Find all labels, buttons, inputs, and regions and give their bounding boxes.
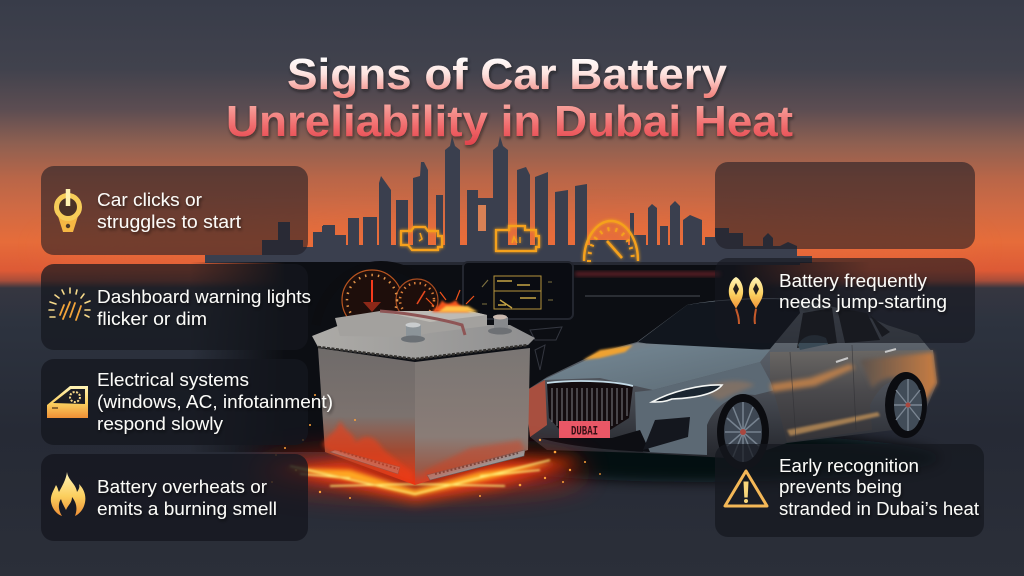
icon: speed gauge warning — [584, 221, 638, 262]
text: car clicks: Car clicks or — [97, 190, 202, 210]
battery right face — [415, 348, 530, 485]
wing mirror — [798, 335, 828, 350]
grille — [547, 381, 633, 430]
lower bumper intake — [540, 430, 650, 452]
instrument cluster gauges — [342, 270, 438, 330]
Dubai skyline silhouette — [205, 136, 812, 263]
hood — [543, 343, 770, 390]
front wheel — [717, 394, 769, 470]
text: early recognition: Early recognition — [779, 456, 919, 476]
battery top plate — [312, 325, 535, 359]
flames on battery — [322, 420, 412, 482]
dashboard — [190, 262, 870, 452]
panel: early recognition — [715, 444, 984, 537]
door orange reflection — [770, 364, 855, 392]
icon: flame — [51, 472, 85, 516]
title: Unreliability in Dubai Heat — [226, 97, 793, 146]
text: electrical: respond slowly — [97, 414, 223, 434]
title: Signs of Car Battery — [287, 50, 728, 99]
headlight — [652, 385, 722, 402]
panel: empty right top — [715, 162, 975, 249]
title — [226, 50, 793, 146]
car shadow on ground — [460, 434, 940, 482]
text: overheats: Battery overheats or — [97, 477, 267, 497]
side windows — [797, 308, 890, 348]
door panels — [770, 350, 937, 442]
luxury sedan car — [527, 298, 937, 470]
car battery overheating — [312, 290, 535, 485]
battery left face — [318, 348, 415, 485]
steering wheel — [316, 265, 446, 325]
warning lights above dashboard — [401, 221, 638, 262]
text: dashboard: Dashboard warning lights — [97, 287, 311, 307]
panel: dashboard warning lights — [41, 264, 311, 350]
front fender and bumper — [635, 362, 775, 455]
red fire-lit bumper side — [527, 380, 547, 437]
door handles — [836, 349, 896, 362]
rear wheel — [885, 372, 927, 438]
text: dashboard: flicker or dim — [97, 309, 207, 329]
text: electrical: Electrical systems — [97, 370, 249, 390]
icon: car door — [47, 386, 88, 418]
fire behind lid — [432, 300, 470, 312]
sparks — [271, 394, 601, 499]
text: electrical: (windows, AC, infotainment) — [97, 392, 333, 412]
number plate DUBAI: DUBAI — [571, 424, 598, 438]
icon: power bulb — [56, 189, 80, 232]
sill reflection — [787, 412, 880, 436]
text: car clicks: struggles to start — [97, 212, 241, 232]
text: jump-starting: Battery frequently — [779, 271, 927, 291]
panel: car clicks or struggles to start — [41, 166, 308, 255]
panel: jump-starting — [715, 258, 975, 343]
battery lid block — [335, 311, 487, 337]
battery vents — [330, 450, 525, 480]
windshield — [638, 299, 800, 350]
panel: electrical systems — [41, 359, 333, 445]
text: early recognition: stranded in Dubai’s heat — [779, 499, 979, 519]
icon: flickering lights — [49, 288, 90, 320]
icon: jumper clamps — [729, 277, 763, 324]
infotainment screen — [463, 262, 573, 319]
icon: warning triangle — [725, 471, 767, 506]
hood orange reflection — [583, 345, 633, 360]
battery handle — [380, 311, 465, 335]
text: jump-starting: needs jump-starting — [779, 292, 947, 312]
icon: engine warning — [401, 227, 442, 250]
text: overheats: emits a burning smell — [97, 499, 277, 519]
panel: overheats — [41, 454, 308, 541]
molten heat glow under battery — [255, 452, 585, 502]
rear quarter reflection — [860, 352, 937, 402]
terminals — [401, 314, 512, 342]
icon: battery warning — [496, 226, 539, 251]
text: early recognition: prevents being — [779, 477, 902, 497]
number plate DUBAI — [559, 421, 610, 438]
